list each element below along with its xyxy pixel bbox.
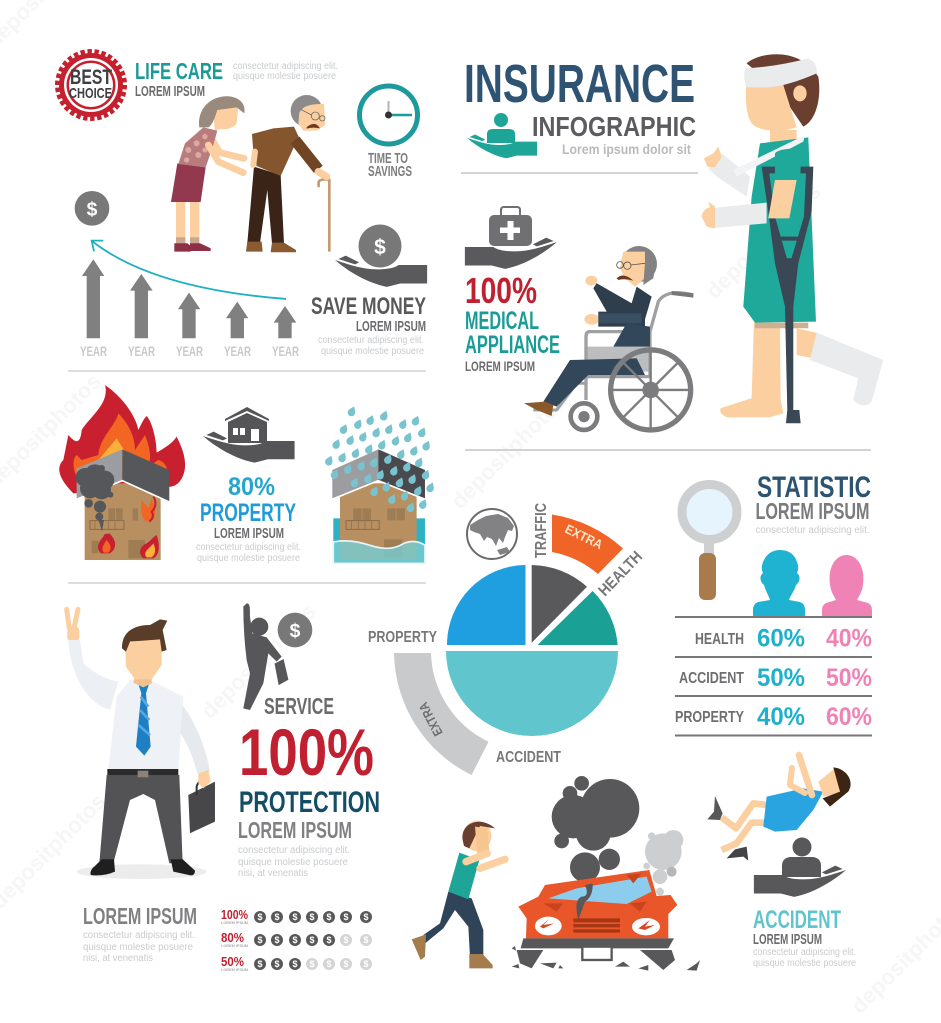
- arrow: savings curve: [92, 241, 286, 299]
- illustration: man in wheelchair: [524, 246, 693, 430]
- icon: globe: [467, 509, 517, 559]
- text block: save money description: quisque molestie posuere: [321, 346, 424, 357]
- extra band: gray: [394, 653, 488, 775]
- subheading: life care lorem ipsum: LOREM IPSUM: [135, 84, 205, 100]
- extra band: orange: [552, 514, 623, 574]
- icon: magnifier: [682, 484, 737, 600]
- chart label: health: HEALTH: [596, 548, 646, 600]
- dollar rating rows: $: [292, 912, 298, 922]
- dollar rating rows: $: [292, 935, 298, 945]
- icon: house on hand: [203, 407, 295, 463]
- text block: save money description: [318, 335, 424, 357]
- dollar rating rows: $: [343, 935, 349, 945]
- statistic table: ACCIDENT: [679, 670, 744, 687]
- dollar rating rows: $: [274, 959, 280, 969]
- stat: 80 percent: 80%: [228, 473, 275, 501]
- title: insurance: INSURANCE: [464, 54, 695, 114]
- dollar rating rows: $: [292, 959, 298, 969]
- label: medical appliance: [465, 307, 560, 359]
- text block: life care description: consectetur adipiscing elit.: [233, 61, 338, 72]
- illustration: woman falling: [707, 755, 851, 861]
- icon: person on hand: [754, 838, 846, 897]
- subtitle: infographic: INFOGRAPHIC: [532, 111, 696, 142]
- text block: bottom description: consectetur adipiscing elit.: [83, 930, 195, 941]
- text block: bottom description: nisi, at venenatis: [83, 953, 153, 964]
- text block: life care description: quisque molestie posuere: [233, 71, 336, 82]
- icon: dollar coin left: [75, 191, 109, 226]
- text: depositphotos: [196, 599, 321, 724]
- dollar rating rows: $: [309, 912, 315, 922]
- subheading: medical lorem ipsum: LOREM IPSUM: [465, 358, 535, 374]
- statistic table: PROPERTY: [675, 709, 744, 726]
- dollar rating rows: LOREM IPSUM: [221, 920, 249, 925]
- label: service: SERVICE: [264, 693, 334, 719]
- dollar rating rows: 80%: [221, 931, 244, 945]
- icon: hand with coin: [335, 224, 427, 287]
- dollar rating rows: $: [274, 935, 280, 945]
- statistic table: 50%: [757, 664, 805, 692]
- chart label: accident: ACCIDENT: [496, 749, 561, 766]
- text: depositphotos: [701, 179, 826, 304]
- old woman: [171, 96, 245, 252]
- dollar rating rows: 100%: [221, 908, 248, 922]
- text block: protection description: [238, 845, 350, 879]
- dollar rating rows: $: [274, 912, 280, 922]
- dollar rating rows: $: [363, 959, 369, 969]
- text block: bottom description: [83, 930, 195, 964]
- subheading: save money lorem ipsum: LOREM IPSUM: [356, 319, 426, 335]
- text block: protection description: consectetur adipiscing elit.: [238, 845, 350, 856]
- illustration: house on fire: [59, 385, 185, 560]
- year labels: YEAR: [224, 343, 251, 359]
- extra band: gray: EXTRA: [415, 699, 446, 739]
- up arrows chart: [82, 259, 296, 338]
- dollar rating rows: [221, 908, 372, 972]
- subheading: bottom lorem ipsum: LOREM IPSUM: [83, 903, 197, 929]
- dollar rating rows: $: [363, 935, 369, 945]
- statistic table: [675, 617, 872, 736]
- dollar rating rows: 50%: [221, 955, 244, 969]
- dollar rating rows: $: [343, 912, 349, 922]
- dollar rating rows: LOREM IPSUM: [221, 943, 249, 948]
- extra band: orange: EXTRA: [563, 521, 606, 552]
- icon: female silhouette: [822, 555, 872, 617]
- label: property: PROPERTY: [200, 499, 296, 527]
- text block: accident description: quisque molestie posuere: [753, 958, 856, 969]
- dollar rating rows: $: [326, 935, 332, 945]
- label: accident: ACCIDENT: [753, 906, 841, 934]
- dollar rating rows: $: [257, 935, 263, 945]
- text block: life care description: [233, 61, 338, 82]
- stat: 100 percent protection: 100%: [239, 715, 374, 789]
- text block: protection description: quisque molestie posuere: [238, 857, 348, 868]
- text block: property description: consectetur adipiscing elit.: [196, 542, 301, 553]
- dollar rating rows: $: [257, 912, 263, 922]
- statistic table: 60%: [826, 703, 872, 731]
- dollar rating rows: $: [257, 959, 263, 969]
- icon: hand with coin: $: [374, 236, 386, 259]
- heading: statistic: STATISTIC: [757, 471, 871, 504]
- subheading: accident lorem ipsum: LOREM IPSUM: [753, 932, 822, 948]
- pie chart: [446, 565, 618, 736]
- stat: 100 percent: 100%: [465, 270, 537, 311]
- year labels: YEAR: [128, 343, 155, 359]
- label: medical appliance: MEDICAL: [465, 307, 539, 335]
- illustration: injured man with crutch: [702, 54, 883, 423]
- illustration: elderly couple: [75, 95, 329, 338]
- text block: accident description: consectetur adipiscing elit.: [753, 947, 856, 958]
- subheading: property lorem ipsum: LOREM IPSUM: [214, 526, 284, 542]
- text block: protection description: nisi, at venenatis: [238, 868, 308, 879]
- icon: male silhouette: [753, 550, 805, 617]
- year labels: YEAR: [272, 343, 299, 359]
- dollar rating rows: $: [363, 912, 369, 922]
- year labels: YEAR: [176, 343, 203, 359]
- label: time to savings: [368, 150, 412, 180]
- text: depositphotos: [446, 389, 571, 514]
- dollar rating rows: LOREM IPSUM: [221, 967, 249, 972]
- text block: save money description: consectetur adipiscing elit.: [318, 335, 424, 346]
- dollar rating rows: $: [343, 959, 349, 969]
- chart label: property: PROPERTY: [368, 629, 438, 646]
- dollar rating rows: $: [309, 959, 315, 969]
- illustration: flooded house in rain: [324, 405, 436, 563]
- badge: best choice: BEST: [70, 66, 112, 89]
- illustration: man running from crash: [412, 821, 505, 968]
- icon: medical kit on hand: [465, 207, 557, 269]
- label: time to savings: TIME TO: [368, 150, 408, 167]
- chart label: traffic: TRAFFIC: [533, 503, 550, 558]
- subheading: protection lorem ipsum: LOREM IPSUM: [238, 817, 352, 843]
- subheading: statistic lorem ipsum: LOREM IPSUM: [756, 498, 870, 524]
- label: medical appliance: APPLIANCE: [465, 331, 560, 359]
- dollar rating rows: $: [326, 959, 332, 969]
- icon: service runner with coin: $: [290, 621, 301, 642]
- illustration: businessman: [67, 609, 215, 879]
- statistic table: 40%: [826, 624, 872, 652]
- dollar rating rows: $: [309, 935, 315, 945]
- icon: service runner with coin: [243, 603, 312, 710]
- icon: clock: [360, 86, 418, 144]
- year labels: [80, 343, 299, 359]
- text block: property description: quisque molestie posuere: [197, 553, 300, 564]
- badge: best choice: CHOICE: [69, 85, 112, 102]
- statistic table: HEALTH: [695, 631, 744, 648]
- heading: save money: SAVE MONEY: [311, 293, 426, 320]
- statistic table: 50%: [826, 664, 872, 692]
- label: time to savings: SAVINGS: [368, 163, 412, 180]
- old man: [246, 95, 329, 252]
- text block: bottom description: quisque molestie posuere: [83, 942, 193, 953]
- text: statistic description: consectetur adipiscing elit.: [756, 525, 870, 536]
- icon: teal hand with person: [467, 113, 537, 158]
- text block: property description: [196, 542, 301, 564]
- year labels: YEAR: [80, 343, 107, 359]
- illustration: crashed car: [512, 776, 700, 971]
- statistic table: 60%: [757, 624, 805, 652]
- icon: dollar coin left: $: [87, 199, 98, 220]
- dollar rating rows: $: [326, 912, 332, 922]
- badge: best choice: [58, 52, 124, 118]
- heading: protection: PROTECTION: [239, 786, 380, 819]
- tagline: Lorem ipsum dolor sit: [562, 142, 691, 157]
- text block: accident description: [753, 947, 856, 969]
- statistic table: 40%: [757, 703, 805, 731]
- heading: life care: LIFE CARE: [135, 58, 223, 84]
